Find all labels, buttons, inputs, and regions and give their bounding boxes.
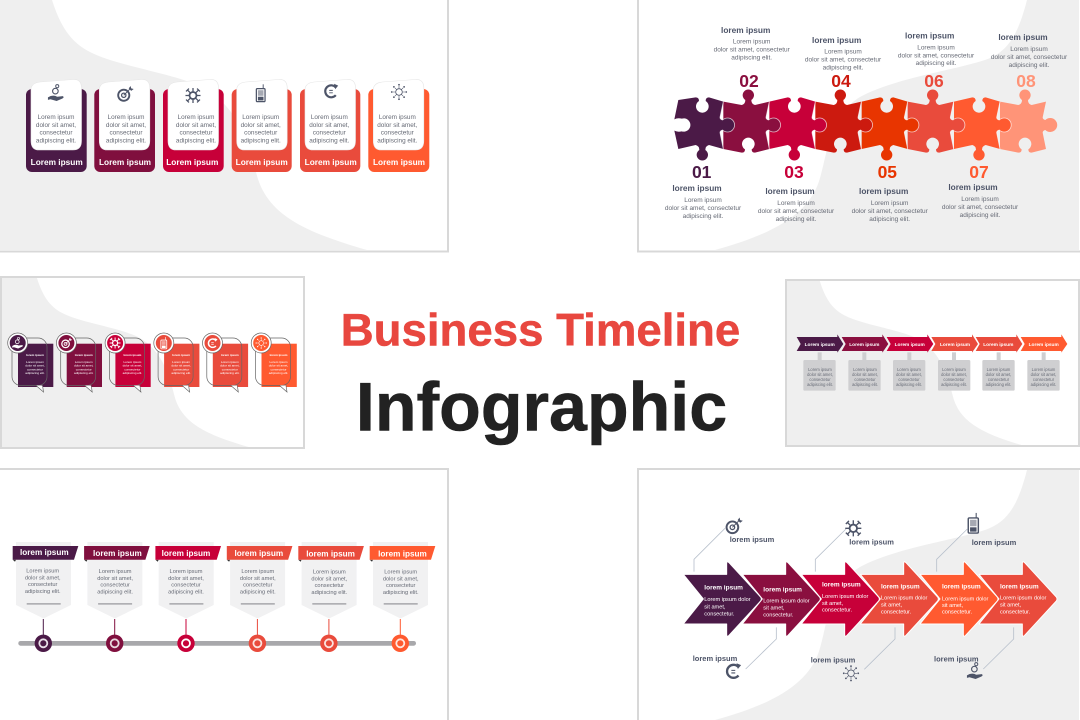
arrow text 3: sit amet, — [822, 601, 844, 607]
callout labels: lorem ipsum — [849, 537, 894, 546]
bubble 5 — [202, 333, 248, 392]
bubble 1: adipiscing elit. — [25, 371, 45, 375]
step 04: dolor sit amet, consectetur — [805, 56, 882, 64]
panel: chevron ribbon — [786, 280, 1079, 446]
arrow text 6 — [1000, 583, 1046, 615]
bubble 4 — [154, 333, 199, 392]
step 03: 03 — [784, 162, 804, 182]
milestone 5: lorem ipsum — [306, 550, 355, 558]
milestone 2: adipiscing elit. — [97, 590, 133, 596]
card 6: consectetur — [381, 130, 415, 137]
card 6: adipiscing elit. — [377, 137, 418, 144]
arrow text 1 — [704, 585, 751, 617]
icon: hand with coins — [967, 663, 983, 679]
step 08 — [991, 32, 1068, 91]
step 02 — [714, 25, 791, 91]
bubble 6 — [251, 333, 297, 392]
step 05: lorem ipsum — [859, 186, 908, 196]
milestone 1: consectetur — [28, 582, 58, 588]
milestone 1: dolor sit amet, — [25, 576, 61, 582]
milestone 1: adipiscing elit. — [25, 589, 61, 595]
milestone 6: lorem ipsum — [378, 550, 427, 558]
step 05: 05 — [878, 162, 897, 182]
chevron labels: Lorem ipsum — [983, 342, 1013, 348]
step 03 — [758, 162, 835, 223]
box text: dolor sit amet, — [941, 372, 967, 377]
arrow text 5 — [942, 583, 988, 616]
box text: adipiscing elit. — [1031, 382, 1056, 387]
timeline rail — [18, 641, 416, 646]
card 6: Lorem ipsum — [373, 157, 425, 167]
arrow text 4: consectetur. — [881, 609, 912, 615]
panel: icon cards — [0, 0, 448, 252]
milestone 5: consectetur — [315, 583, 344, 589]
step 01 — [665, 162, 742, 220]
arrow text 3 — [822, 581, 868, 614]
callout labels: lorem ipsum — [934, 655, 979, 664]
callout labels — [693, 535, 1017, 665]
milestone 6: Lorem ipsum — [384, 570, 417, 576]
box text: Lorem ipsum — [1032, 367, 1056, 372]
bubble 2 — [56, 333, 102, 392]
arrow text 6: consectetur. — [1000, 609, 1031, 615]
box text: adipiscing elit. — [807, 382, 833, 387]
card 4: adipiscing elit. — [241, 137, 281, 144]
bubble 2: lorem ipsum — [75, 353, 93, 357]
bubble 6: adipiscing elit. — [269, 371, 288, 375]
card 1: Lorem ipsum — [31, 157, 83, 167]
step 07: dolor sit amet, consectetur — [942, 204, 1019, 211]
arrow text 6: sit amet, — [1000, 603, 1022, 609]
box text: adipiscing elit. — [896, 382, 922, 387]
milestone 5: dolor sit amet, — [311, 576, 348, 582]
callout labels: lorem ipsum — [811, 656, 856, 665]
panel: puzzle timeline — [638, 0, 1080, 252]
milestone 1 — [13, 542, 78, 652]
card 2: consectetur — [109, 130, 143, 137]
milestone 6: adipiscing elit. — [383, 590, 419, 596]
bubble 3: Lorem ipsum — [123, 360, 142, 364]
card 5: Lorem ipsum — [305, 157, 357, 167]
step 01: Lorem ipsum — [684, 197, 722, 204]
bubble 1: consectetur — [27, 368, 43, 372]
icon: target — [727, 518, 743, 533]
chevron labels: Lorem ipsum — [895, 342, 925, 348]
bubble 6: lorem ipsum — [270, 353, 288, 357]
arrow text 5: lorem ipsum — [942, 583, 981, 590]
box text — [807, 367, 1056, 387]
puzzle chain — [674, 90, 1057, 160]
step 06: Lorem ipsum — [917, 44, 955, 52]
step 07: lorem ipsum — [948, 182, 998, 192]
milestone 2 — [84, 542, 150, 652]
step 07: Lorem ipsum — [961, 196, 999, 203]
box text: Lorem ipsum — [897, 367, 921, 372]
arrow text 2: consectetur. — [763, 613, 794, 619]
bubble 5: lorem ipsum — [221, 353, 239, 357]
card 5: dolor sit amet, — [309, 122, 350, 129]
box text: Lorem ipsum — [942, 367, 966, 372]
step 08: dolor sit amet, consectetur — [991, 54, 1068, 61]
bubble 2: dolor sit amet, — [74, 364, 94, 368]
arrow text 2: Lorem ipsum dolor — [763, 599, 810, 605]
chevron labels: Lorem ipsum — [940, 342, 970, 348]
icon: phone — [968, 513, 978, 533]
callout labels: lorem ipsum — [693, 654, 738, 663]
step 06: 06 — [924, 71, 944, 91]
milestone 4: lorem ipsum — [234, 549, 283, 558]
box text: consectetur — [898, 377, 920, 382]
arrow text 2 — [763, 586, 810, 619]
milestone 4: consectetur — [243, 583, 273, 589]
milestone 5 — [298, 542, 364, 652]
milestone 3: Lorem ipsum — [170, 569, 203, 575]
title: Infographic — [356, 370, 727, 446]
milestone 2: lorem ipsum — [93, 549, 142, 558]
card 1: Lorem ipsum — [38, 114, 74, 121]
bubble 6: dolor sit amet, — [269, 364, 288, 368]
step 08: Lorem ipsum — [1010, 46, 1048, 53]
step 06 — [898, 30, 975, 91]
milestone 2: consectetur — [100, 583, 130, 589]
box text: dolor sit amet, — [807, 372, 833, 377]
step 03: Lorem ipsum — [777, 200, 815, 207]
step 07: 07 — [969, 162, 989, 182]
chevron labels: Lorem ipsum — [805, 342, 835, 348]
icon: clock — [727, 663, 741, 678]
milestone 6: consectetur — [386, 583, 416, 589]
step 02: Lorem ipsum — [733, 38, 770, 46]
step 08: lorem ipsum — [998, 32, 1048, 42]
card 3: consectetur — [179, 130, 213, 137]
step 04: 04 — [831, 71, 851, 91]
icon: gear — [845, 520, 861, 536]
box text: consectetur — [1033, 377, 1055, 382]
bubble 5: adipiscing elit. — [220, 371, 240, 375]
step 05 — [852, 162, 929, 223]
arrow text 1: lorem ipsum — [704, 585, 743, 592]
card 4: Lorem ipsum — [236, 157, 288, 167]
step 08: 08 — [1016, 71, 1036, 91]
card 1: adipiscing elit. — [36, 137, 76, 144]
arrow text 6: lorem ipsum — [1000, 583, 1039, 590]
card 1: consectetur — [39, 130, 73, 137]
step 07: adipiscing elit. — [960, 212, 1001, 219]
card 2: dolor sit amet, — [106, 122, 146, 129]
bubble 2: Lorem ipsum — [75, 360, 93, 364]
arrow text 6: Lorem ipsum dolor — [1000, 595, 1046, 601]
box text: adipiscing elit. — [986, 382, 1011, 387]
step 07 — [942, 162, 1019, 219]
step 01: 01 — [692, 162, 712, 182]
milestone 4 — [227, 542, 292, 652]
milestone 6: dolor sit amet, — [383, 576, 419, 582]
title: Business Timeline — [341, 304, 740, 355]
card 4: consectetur — [244, 130, 278, 137]
bubble 2: consectetur — [76, 368, 92, 372]
card 2: Lorem ipsum — [108, 114, 144, 121]
chevron labels: Lorem ipsum — [1029, 342, 1059, 348]
card 2: Lorem ipsum — [99, 157, 151, 167]
step 02: 02 — [739, 71, 759, 91]
arrow text 4 — [881, 583, 927, 615]
step 05: Lorem ipsum — [871, 200, 908, 207]
box text: adipiscing elit. — [852, 382, 878, 387]
step 04: Lorem ipsum — [824, 48, 862, 56]
milestone 5: Lorem ipsum — [313, 570, 346, 576]
arrow text 5: Lorem ipsum dolor — [942, 596, 988, 602]
card 4: Lorem ipsum — [242, 114, 279, 121]
step 05: dolor sit amet, consectetur — [852, 208, 929, 215]
box text: dolor sit amet, — [896, 372, 922, 377]
bubble 5: consectetur — [222, 368, 238, 372]
callout labels: lorem ipsum — [730, 535, 775, 544]
bubble 5: dolor sit amet, — [220, 364, 240, 368]
milestone 4: adipiscing elit. — [240, 590, 276, 596]
step 03: lorem ipsum — [765, 186, 815, 196]
step 08: adipiscing elit. — [1009, 62, 1050, 69]
bubble 3: lorem ipsum — [123, 353, 142, 357]
milestone 3: consectetur — [171, 583, 201, 589]
milestone 3 — [155, 542, 221, 652]
card 6: dolor sit amet, — [377, 122, 418, 129]
milestone 4: dolor sit amet, — [240, 576, 276, 582]
card 5: Lorem ipsum — [311, 114, 348, 121]
step 05: adipiscing elit. — [869, 216, 910, 223]
box text: dolor sit amet, — [986, 372, 1011, 377]
card 6 — [368, 79, 429, 172]
step 06: lorem ipsum — [905, 30, 954, 40]
step 04: lorem ipsum — [812, 35, 861, 45]
milestone 3: adipiscing elit. — [168, 590, 204, 596]
step 04 — [805, 35, 882, 91]
bubble 4: consectetur — [173, 368, 189, 372]
step 06: adipiscing elit. — [916, 60, 957, 67]
card 4: dolor sit amet, — [241, 122, 281, 129]
arrow text 4: lorem ipsum — [881, 583, 920, 590]
milestone 2: Lorem ipsum — [99, 569, 132, 575]
bubble 3: consectetur — [124, 368, 140, 372]
arrow text 4: Lorem ipsum dolor — [881, 595, 927, 601]
box text: consectetur — [943, 377, 965, 382]
step 01: adipiscing elit. — [683, 213, 724, 220]
milestone 6 — [370, 542, 435, 652]
card 2: adipiscing elit. — [106, 137, 146, 144]
card 1 — [26, 79, 87, 172]
box text: dolor sit amet, — [852, 372, 878, 377]
bubble 3: adipiscing elit. — [123, 371, 142, 375]
step 06: dolor sit amet, consectetur — [898, 52, 975, 60]
box text: dolor sit amet, — [1031, 372, 1056, 377]
chevron labels: Lorem ipsum — [849, 342, 879, 348]
arrow text 2: lorem ipsum — [763, 586, 802, 593]
box text: Lorem ipsum — [808, 367, 832, 372]
milestone 1: Lorem ipsum — [26, 568, 59, 574]
card 5 — [300, 79, 360, 172]
bubble 1: Lorem ipsum — [26, 360, 44, 364]
milestone 5: adipiscing elit. — [311, 590, 348, 596]
bubble 5: Lorem ipsum — [221, 360, 239, 364]
step 03: dolor sit amet, consectetur — [758, 208, 835, 215]
box text: consectetur — [854, 377, 876, 382]
bubble 3: dolor sit amet, — [123, 364, 142, 368]
bubble 1 — [8, 333, 53, 392]
card 3: Lorem ipsum — [166, 157, 218, 167]
callout labels: lorem ipsum — [972, 538, 1017, 547]
arrow text 5: sit amet, — [942, 603, 964, 609]
milestone 1: lorem ipsum — [20, 548, 69, 557]
step 02: adipiscing elit. — [731, 54, 772, 62]
step 01: lorem ipsum — [672, 183, 722, 193]
panel: ribbon timeline — [0, 469, 448, 720]
arrow text 3: Lorem ipsum dolor — [822, 594, 868, 600]
card 6: Lorem ipsum — [379, 114, 416, 121]
milestone 4: Lorem ipsum — [241, 569, 274, 575]
step 02: dolor sit amet, consectetur — [714, 46, 791, 54]
box text: Lorem ipsum — [853, 367, 877, 372]
card 2 — [94, 79, 155, 172]
step 01: dolor sit amet, consectetur — [665, 205, 742, 212]
bubble 6: consectetur — [270, 368, 286, 372]
bubble 4: dolor sit amet, — [171, 364, 191, 368]
card 3: adipiscing elit. — [176, 137, 216, 144]
box text: consectetur — [809, 377, 831, 382]
milestone 2: dolor sit amet, — [97, 576, 133, 582]
card 4 — [232, 79, 292, 172]
arrow text 3: lorem ipsum — [822, 581, 861, 588]
arrow text 1: Lorem ipsum dolor — [704, 597, 751, 603]
panel: speech bubble cards — [1, 277, 304, 448]
box text: adipiscing elit. — [941, 382, 967, 387]
chevron labels — [805, 342, 1059, 348]
step 02: lorem ipsum — [721, 25, 770, 35]
panel: big arrows — [638, 469, 1080, 720]
card 3: Lorem ipsum — [178, 114, 214, 121]
bubble 6: Lorem ipsum — [270, 360, 288, 364]
card 3: dolor sit amet, — [176, 122, 216, 129]
box text: consectetur — [988, 377, 1010, 382]
bubble 1: lorem ipsum — [26, 353, 44, 357]
bubble 4: Lorem ipsum — [172, 360, 190, 364]
bubble 2: adipiscing elit. — [74, 371, 94, 375]
card 5: consectetur — [313, 130, 347, 137]
bubble 1: dolor sit amet, — [25, 364, 45, 368]
arrow text 1: consectetur. — [704, 611, 735, 617]
card 3 — [163, 79, 224, 172]
card 5: adipiscing elit. — [309, 137, 350, 144]
bubble 4: adipiscing elit. — [171, 371, 191, 375]
bubble 3 — [105, 333, 151, 392]
icon: network — [843, 665, 859, 681]
step 03: adipiscing elit. — [776, 216, 817, 223]
arrow shapes and leader lines — [683, 528, 1057, 669]
title — [341, 304, 740, 446]
box text: Lorem ipsum — [987, 367, 1011, 372]
arrow text 5: consectetur. — [942, 610, 973, 616]
arrow text 1: sit amet, — [704, 604, 726, 610]
arrow text 2: sit amet, — [763, 606, 785, 612]
milestone 3: dolor sit amet, — [168, 576, 204, 582]
step 04: adipiscing elit. — [823, 64, 864, 72]
bubble 4: lorem ipsum — [172, 353, 190, 357]
milestone 3: lorem ipsum — [162, 549, 210, 558]
arrow text 4: sit amet, — [881, 603, 903, 609]
card 1: dolor sit amet, — [36, 122, 76, 129]
arrow text 3: consectetur. — [822, 608, 853, 614]
chevrons and connectors — [797, 334, 1067, 391]
